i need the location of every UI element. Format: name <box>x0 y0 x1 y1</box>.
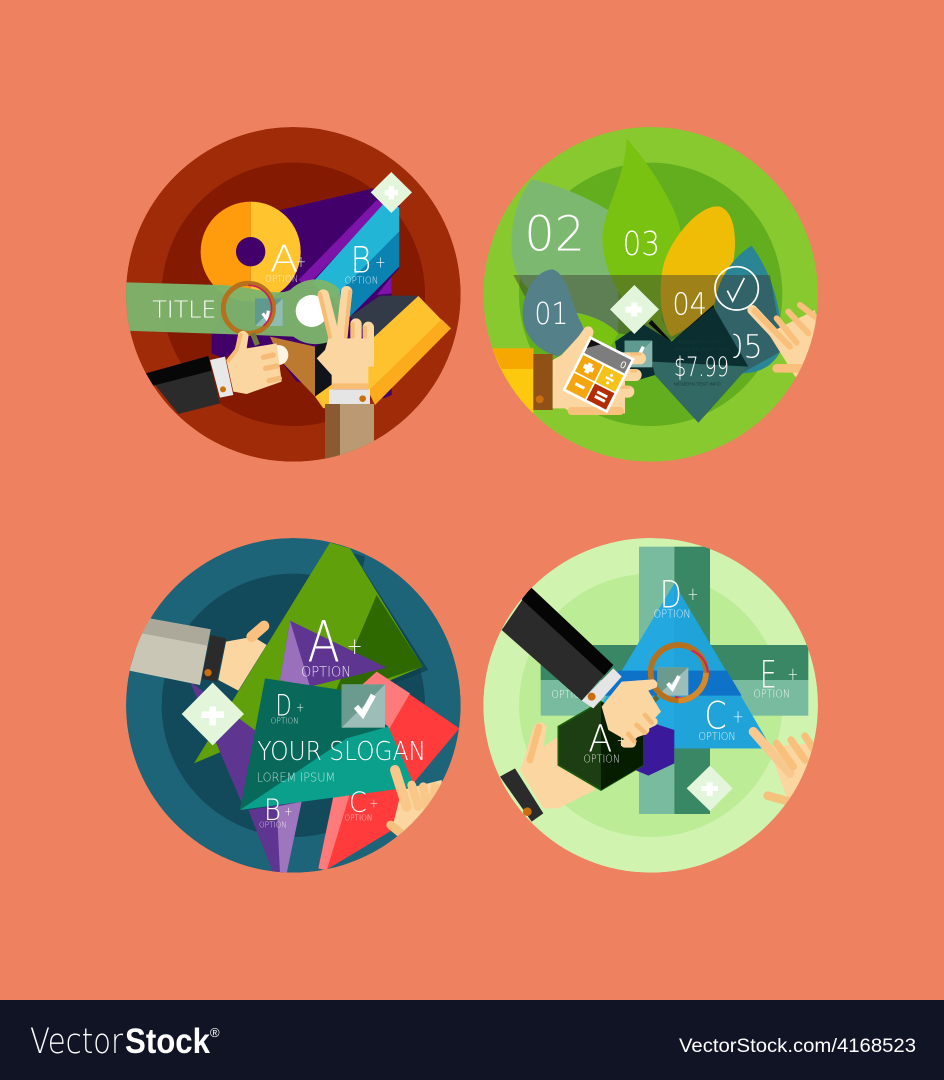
lorem ipsum text: LOREM IPSUM <box>257 770 335 784</box>
leaf 02 <box>511 179 618 333</box>
lower purple shapes <box>190 682 302 873</box>
title band <box>126 279 340 344</box>
option E label: + <box>787 665 798 685</box>
option C label <box>344 785 378 822</box>
option A label <box>583 717 626 765</box>
slogan text: YOUR SLOGAN <box>257 737 426 767</box>
pointing hand <box>753 732 815 807</box>
option C label <box>698 694 744 743</box>
blue ribbon <box>298 200 399 320</box>
option A label <box>302 620 361 676</box>
option E label: OPTION <box>753 687 790 700</box>
panel: green circle with leaves <box>483 127 820 462</box>
green hexagon <box>558 702 643 790</box>
option A label: OPTION <box>583 752 620 765</box>
numbers: 03 <box>623 224 660 263</box>
option B label: + <box>375 253 386 272</box>
upper purple shape <box>280 621 387 687</box>
option D label <box>654 572 698 621</box>
slogan banner <box>240 678 415 810</box>
plus diamond icon <box>687 766 733 811</box>
price text: MODERN TEXT INFO <box>675 347 730 353</box>
footer url: VectorStock.com/4168523 <box>679 1036 916 1057</box>
option A label: + <box>347 632 363 660</box>
plus diamond icon <box>182 683 244 745</box>
option D label: D <box>660 572 682 616</box>
panel: teal circle with slogan <box>126 538 461 873</box>
dark diamond price tag <box>615 305 748 423</box>
footer logo <box>30 1022 220 1062</box>
hand with black sleeve <box>502 587 661 743</box>
hand holding calculator <box>553 326 640 413</box>
white circle <box>296 295 324 327</box>
price text: $7.99 <box>674 352 729 383</box>
option C label: OPTION <box>698 730 736 743</box>
leaf 04 <box>661 206 735 337</box>
option E label: E <box>760 652 777 696</box>
pointing hand <box>391 770 443 840</box>
magnifier <box>651 645 708 703</box>
price text: MODERN TEXT INFO <box>678 339 722 345</box>
green triangle <box>194 543 428 763</box>
option A label <box>266 244 305 282</box>
numbers <box>528 214 760 358</box>
option B label <box>259 793 293 830</box>
footer bar <box>0 1000 944 1080</box>
leaf 01 <box>523 269 585 357</box>
panel: red circle with title and options <box>126 127 461 462</box>
checkbox <box>657 667 688 696</box>
purple background shape <box>212 188 399 398</box>
option B partial label: OPTION <box>551 688 588 701</box>
calculator <box>562 336 635 413</box>
price text <box>674 340 728 386</box>
option C label: + <box>732 708 744 728</box>
magnifier <box>223 283 273 345</box>
cross chart <box>541 547 808 814</box>
calculator: 0 <box>618 360 628 372</box>
plus diamond icon <box>371 172 412 213</box>
option C label: C <box>704 694 727 738</box>
option A label: OPTION <box>265 274 298 285</box>
numbers: 04 <box>672 287 707 322</box>
option D label: OPTION <box>271 717 299 726</box>
numbers: 05 <box>724 327 763 365</box>
pointing hand <box>752 305 820 377</box>
option D label: D <box>276 688 292 722</box>
option A label: OPTION <box>301 665 351 681</box>
option B label <box>345 246 384 284</box>
purple hexagon <box>635 720 674 776</box>
option A label: A <box>307 610 340 676</box>
layered folded shapes <box>270 296 451 408</box>
option B label: B <box>264 793 281 827</box>
option D label: OPTION <box>654 608 691 621</box>
option A label: A <box>588 717 612 761</box>
footer logo: ® <box>210 1025 220 1040</box>
option D label: + <box>687 585 698 605</box>
hand with suit sleeve <box>146 331 288 414</box>
option B label: + <box>284 803 293 818</box>
left sleeve <box>492 348 553 415</box>
hand with grey sleeve <box>129 618 267 691</box>
footer logo: Stock <box>125 1022 210 1061</box>
bright green arc <box>577 314 618 346</box>
title text: TITLE <box>152 297 216 323</box>
option B label: OPTION <box>345 275 378 286</box>
option A label: A <box>270 238 298 281</box>
leaf 05 <box>715 246 782 373</box>
panel: pale green circle with cross <box>483 538 818 873</box>
option B label: B <box>351 239 371 282</box>
option C label: C <box>349 785 367 818</box>
dark band overlay <box>513 275 783 373</box>
plus diamond icon <box>610 285 659 334</box>
option C label: OPTION <box>344 813 372 822</box>
red shapes <box>318 672 459 872</box>
checkbox <box>342 684 385 728</box>
option C label: + <box>369 795 378 810</box>
numbers: 01 <box>534 297 568 332</box>
option D label: + <box>296 699 304 714</box>
leaf 03 <box>602 138 682 337</box>
checkbox <box>625 341 652 367</box>
lower left hand <box>500 722 595 822</box>
option A label: + <box>296 252 306 271</box>
numbers: 02 <box>524 207 585 263</box>
option E label <box>753 652 798 700</box>
blue triangle <box>575 583 772 748</box>
footer logo: Vector <box>30 1022 124 1062</box>
donut chart <box>201 202 301 302</box>
option A label: + <box>617 731 626 751</box>
check circle icon <box>715 267 758 310</box>
option D label <box>271 688 304 726</box>
option B label: OPTION <box>259 821 287 830</box>
checkbox <box>255 298 283 326</box>
price text: MODERN TEXT INFO <box>674 381 721 387</box>
victory hand <box>317 292 374 460</box>
